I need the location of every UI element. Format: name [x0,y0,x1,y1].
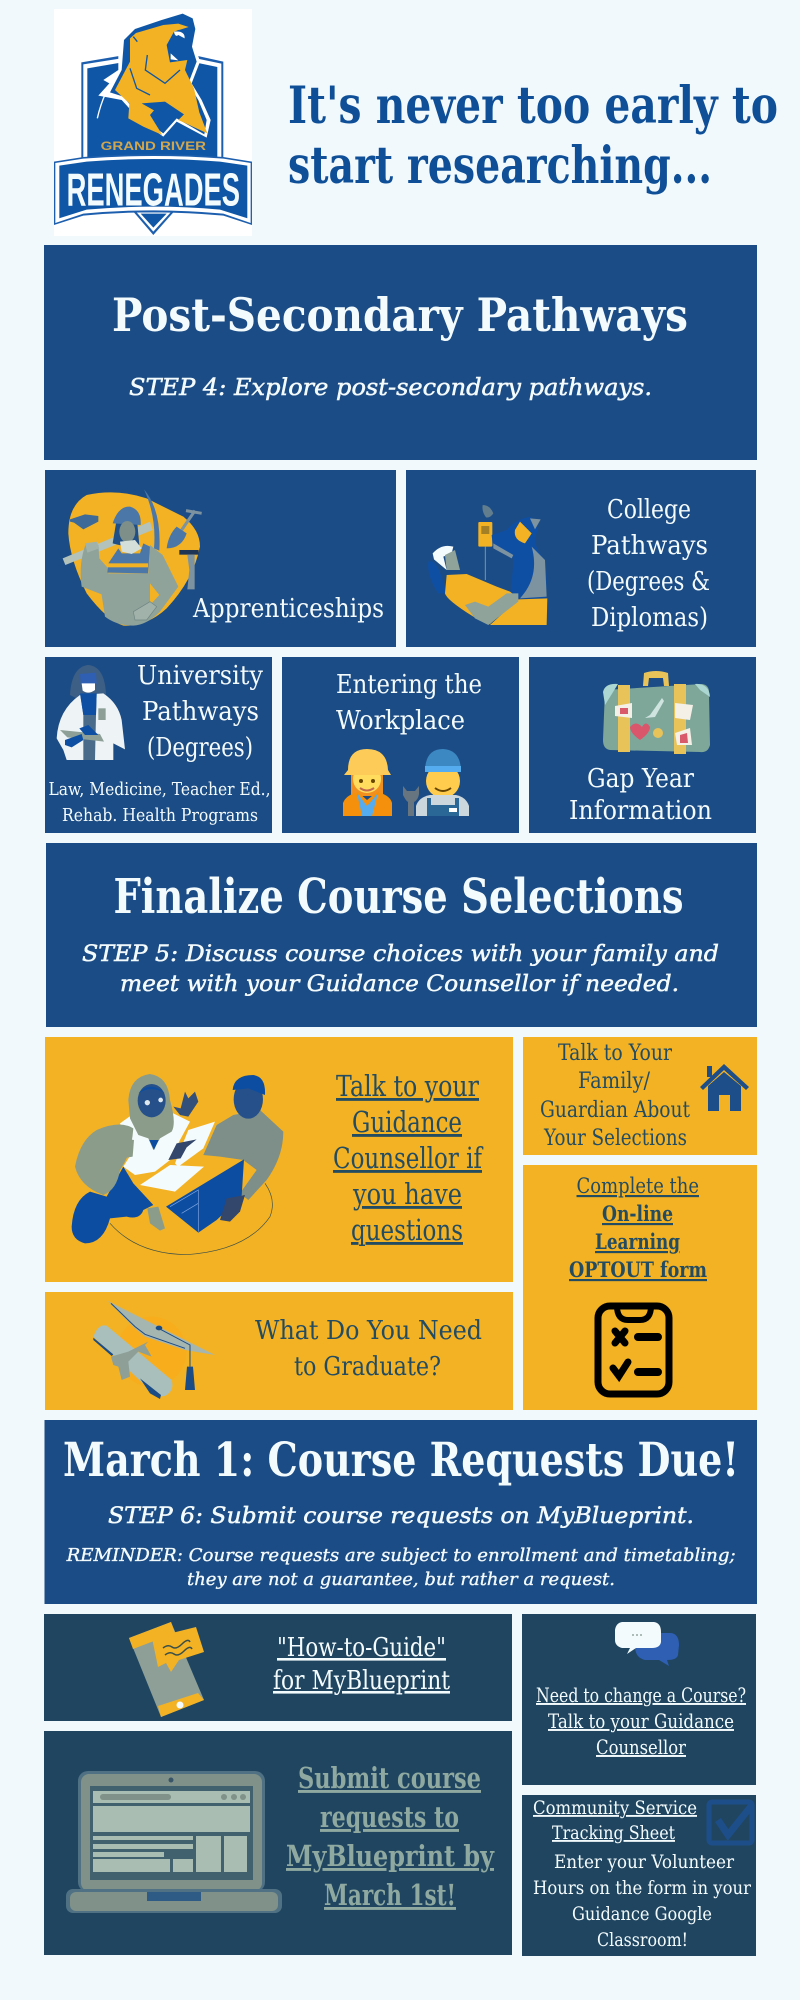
icon: wrench [403,786,419,816]
text: step 6: STEP 6: Submit course requests on MyBlueprint. [108,1504,694,1529]
icon: speech bubbles [615,1622,679,1666]
label: Talk to your Guidance Counsellor if you have questions: Talk to your [336,1070,479,1103]
label: Gap Year Information: Gap Year [587,764,695,794]
panel: Submit course requests [44,1731,512,1955]
panel: Community Service Tracking Sheet [522,1795,756,1956]
label: Talk to your Guidance Counsellor if you have questions: questions [351,1214,463,1247]
title: It's never too early to start researching [288,76,778,196]
text: step 5 [82,942,719,997]
panel: Gap Year Information [529,657,756,833]
label: Talk to your Guidance Counsellor if you have questions: Counsellor if [333,1142,484,1175]
label: Talk to your Guidance Counsellor if you have questions [333,1070,484,1247]
panel: College Pathways [406,470,756,647]
logo: Grand River Renegades: GRAND RIVER [101,139,206,153]
icon: graduation cap and diploma [93,1301,215,1399]
text: enter your volunteer hours: Enter your Volunteer [554,1851,735,1873]
icon: checklist clipboard [598,1306,669,1394]
label: Need to change a Course?: Need to change a Course? [536,1684,746,1707]
icon: patient and health worker [428,505,547,625]
text: enter your volunteer hours: Classroom! [597,1929,688,1951]
label: University Pathways: Pathways [142,697,259,727]
heading: Post-Secondary Pathways: Post-Secondary Pathways [112,288,688,342]
label: Talk to Your Family/Guardian About Your Selections: Guardian About [540,1098,690,1123]
text: reminder: they are not a guarantee, but rather a request. [187,1569,615,1590]
label: Talk to your Guidance Counsellor if you have questions: Guidance [352,1106,462,1139]
label: How-to-Guide for MyBlueprint: for MyBlueprint [273,1666,450,1696]
label: Community Service Tracking Sheet: Tracking Sheet [552,1823,675,1844]
panel: Post-Secondary Pathways header [44,245,757,460]
label: University Pathways: (Degrees) [147,733,253,763]
label: University Pathways [137,661,263,763]
text: enter your volunteer hours: Hours on the form in your [533,1877,752,1899]
panel: Need to change a course [522,1614,756,1785]
text: university programs [48,779,270,826]
panel: Talk to your Guidance Counsellor [45,1037,513,1282]
icon: laptop [66,1771,282,1913]
panel: Finalize Course Selections [46,843,757,1027]
label: What Do You Need to Graduate? [255,1316,482,1382]
label: Complete the On-line Learning OPTOUT form: OPTOUT form [569,1258,707,1283]
icon: mechanic emoji [416,749,469,816]
label: Complete the On-line Learning OPTOUT form: On-line [602,1202,673,1227]
text: university programs: Law, Medicine, Teacher Ed., [48,779,270,800]
label: College Pathways: (Degrees & [587,567,710,597]
panel: March 1 Course Requests Due [44,1420,757,1604]
panel: How-to-Guide for MyBlueprint [44,1614,512,1721]
label: Complete the On-line Learning OPTOUT form [569,1174,707,1283]
label: How-to-Guide for MyBlueprint [273,1633,450,1696]
label: College Pathways: Pathways [591,531,708,561]
label: University Pathways: University [137,661,263,691]
label: College Pathways: Diplomas) [591,603,708,633]
text: enter your volunteer hours: Guidance Google [572,1903,712,1925]
text: reminder: REMINDER: Course requests are subject to enrollment and timetabling; [66,1545,736,1566]
label: Talk to your Guidance Counsellor if you have questions: you have [352,1178,462,1211]
panel: University Pathways [45,657,272,833]
label: Talk to Your Family/Guardian About Your Selections: Your Selections [543,1126,687,1151]
label: College Pathways: College [607,495,691,525]
label: Entering the Workplace [336,670,482,736]
label: Entering the Workplace: Entering the [336,670,482,700]
label: Complete the On-line Learning OPTOUT form: Complete the [576,1174,699,1199]
icon: phone with chat bubble [129,1622,204,1717]
label: Need to change a Course? [536,1684,746,1759]
text: enter your volunteer hours [533,1851,752,1951]
text: step 5: STEP 5: Discuss course choices with your family and [82,942,719,967]
label: What Do You Need to Graduate?: to Graduate? [294,1352,441,1382]
label: How-to-Guide for MyBlueprint: "How-to-Guide" [277,1633,446,1663]
label: Apprenticeships: Apprenticeships [192,594,384,624]
icon: suitcase [603,671,710,754]
text: step 5: meet with your Guidance Counsellor if needed. [120,972,679,997]
icon: university doctor [57,665,125,760]
logo: Grand River Renegades [54,9,252,236]
label: Gap Year Information [569,764,712,826]
label: Complete the On-line Learning OPTOUT form: Learning [595,1230,680,1255]
label: Entering the Workplace: Workplace [336,706,465,736]
label: Need to change a Course?: Talk to your Guidance [548,1710,734,1733]
text: university programs: Rehab. Health Programs [62,805,258,826]
icon: check box [709,1802,752,1843]
label: Submit course requests to MyBlueprint by March 1st!: Submit course [298,1761,481,1795]
label: Talk to Your Family/Guardian About Your Selections: Talk to Your [558,1041,672,1066]
panel: What Do You Need to Graduate [45,1292,513,1410]
label: College Pathways [587,495,710,633]
panel: Apprenticeships [45,470,396,647]
panel: Entering the Workplace [282,657,519,833]
text: step 4: STEP 4: Explore post-secondary pathways. [129,375,652,401]
label: Community Service Tracking Sheet: Community Service [533,1798,697,1819]
icon: house [700,1064,749,1111]
panel: Talk to your family [523,1037,757,1155]
icon: tradesperson with tools [63,489,202,626]
icon: construction worker emoji [343,749,392,816]
label: Submit course requests to MyBlueprint by March 1st!: MyBlueprint by [286,1839,495,1873]
text: reminder [66,1545,736,1590]
label: Submit course requests to MyBlueprint by March 1st!: requests to [320,1800,459,1834]
label: Submit course requests to MyBlueprint by March 1st!: March 1st! [324,1878,456,1912]
label: Gap Year Information: Information [569,796,712,826]
label: Talk to Your Family/Guardian About Your Selections: Family/ [578,1069,651,1094]
label: Need to change a Course?: Counsellor [596,1736,687,1759]
label: Talk to Your Family/Guardian About Your Selections [540,1041,690,1151]
label: What Do You Need to Graduate?: What Do You Need [255,1316,482,1346]
panel: On-line Learning OPTOUT form [523,1165,757,1410]
icon: students meeting with counsellor [72,1074,283,1255]
label: Submit course requests to MyBlueprint by March 1st! [286,1761,495,1912]
logo: Grand River Renegades: RENEGADES [67,164,240,216]
label: Community Service Tracking Sheet [533,1798,697,1844]
